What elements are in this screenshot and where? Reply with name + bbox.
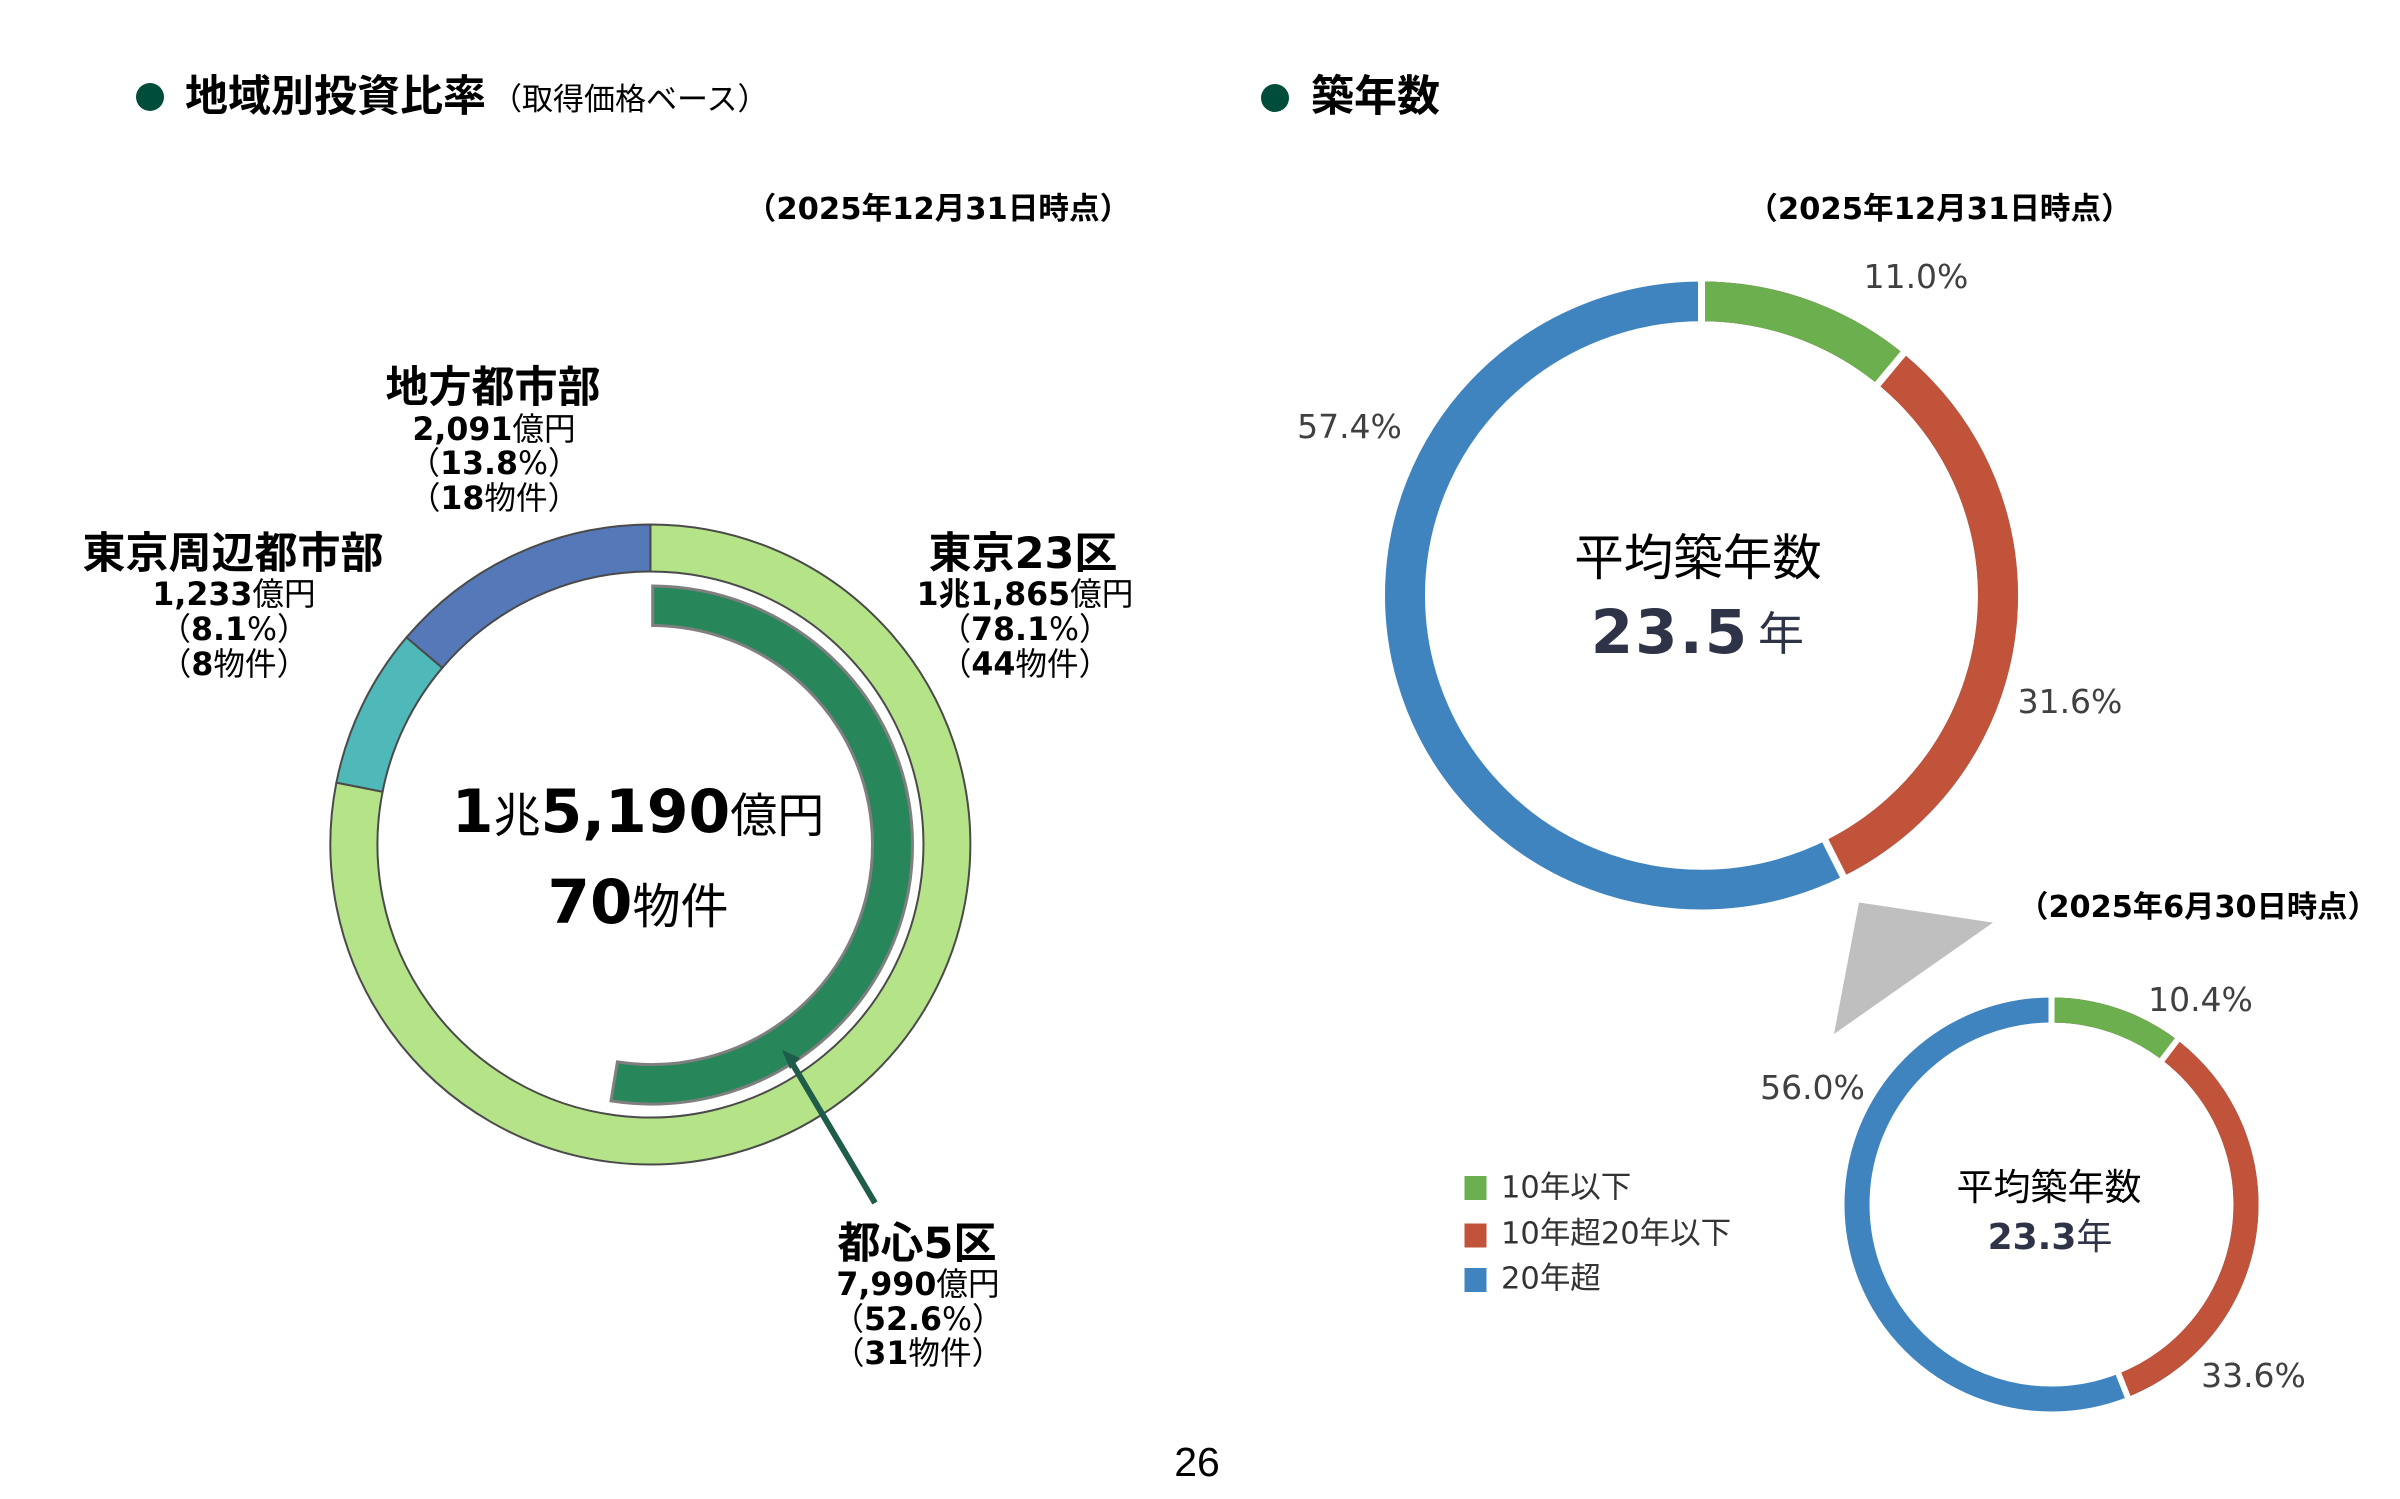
center: average age previous: 23.3年 <box>1988 1208 2112 1260</box>
center total <box>452 777 824 938</box>
label: Tokyo suburbs: （8物件） <box>160 639 308 685</box>
center: average age previous: 平均築年数 <box>1956 1157 2142 1211</box>
center: average age current: 23.5 <box>1591 597 1749 668</box>
label: Tokyo 23 wards: 東京23区 <box>929 519 1117 581</box>
donut chart: building age current <box>1405 273 1998 890</box>
data labels: current: 11.0% <box>1864 257 1968 296</box>
label: Tokyo 23 wards: （78.1%） <box>939 604 1111 650</box>
heading: regional investment ratio: 地域別投資比率 <box>185 62 486 124</box>
center: average age previous <box>1956 1157 2142 1260</box>
date note: left: （2025年12月31日時点） <box>746 192 1130 227</box>
label: central 5 wards: （31物件） <box>833 1328 1003 1374</box>
data labels: previous: 56.0% <box>1760 1068 1865 1107</box>
center total: 1兆5,190億円 <box>452 777 824 847</box>
label: central 5 wards: 7,990億円 <box>836 1259 1000 1305</box>
data labels: previous: 10.4% <box>2148 980 2253 1019</box>
label: Tokyo suburbs: （8.1%） <box>159 604 309 650</box>
donut chart: building age previous <box>1857 990 2246 1404</box>
label: Tokyo suburbs: 東京周辺都市部 <box>82 519 384 581</box>
label: regional cities <box>386 353 600 519</box>
center: average age current <box>1574 519 1822 668</box>
label: Tokyo suburbs <box>82 519 384 685</box>
arrow: comparison triangle <box>1834 902 1993 1034</box>
label: central 5 wards: 都心5区 <box>838 1209 996 1271</box>
label: regional cities: （18物件） <box>409 473 579 519</box>
label: central 5 wards: （52.6%） <box>832 1294 1004 1340</box>
label: Tokyo 23 wards: 1兆1,865億円 <box>917 569 1133 615</box>
legend <box>1464 1162 1731 1298</box>
legend: 10年以下 <box>1501 1162 1631 1206</box>
label: regional cities: 地方都市部 <box>386 353 600 415</box>
data labels: previous <box>1760 980 2306 1395</box>
heading: regional investment ratio <box>136 62 768 124</box>
panel: building age <box>1261 62 2378 1404</box>
label: Tokyo 23 wards: （44物件） <box>940 639 1110 685</box>
arrow: to central 5 wards <box>782 1050 875 1203</box>
donut chart: regional ratio <box>330 524 970 1165</box>
center total: 70物件 <box>548 867 728 938</box>
label: regional cities: （13.8%） <box>408 438 580 484</box>
heading: building age: 築年数 <box>1311 62 1440 124</box>
center: average age current: 年 <box>1758 598 1804 664</box>
label: Tokyo 23 wards <box>917 519 1133 685</box>
date note: right bottom: （2025年6月30日時点） <box>2018 890 2378 925</box>
data labels: previous: 33.6% <box>2201 1356 2306 1395</box>
panel: regional investment ratio <box>82 62 1133 1374</box>
label: Tokyo suburbs: 1,233億円 <box>152 569 316 615</box>
center: average age current: 平均築年数 <box>1574 519 1822 590</box>
data labels: current <box>1297 257 2122 721</box>
label: regional cities: 2,091億円 <box>412 404 576 450</box>
page number: 26 <box>1174 1439 1220 1485</box>
date note: right top: （2025年12月31日時点） <box>1747 192 2132 227</box>
legend: 20年超 <box>1501 1254 1601 1298</box>
heading: regional investment ratio: （取得価格ベース） <box>491 74 768 119</box>
label: central 5 wards <box>832 1209 1004 1374</box>
legend: 10年超20年以下 <box>1501 1208 1731 1252</box>
data labels: current: 57.4% <box>1297 407 1402 446</box>
data labels: current: 31.6% <box>2018 682 2122 721</box>
